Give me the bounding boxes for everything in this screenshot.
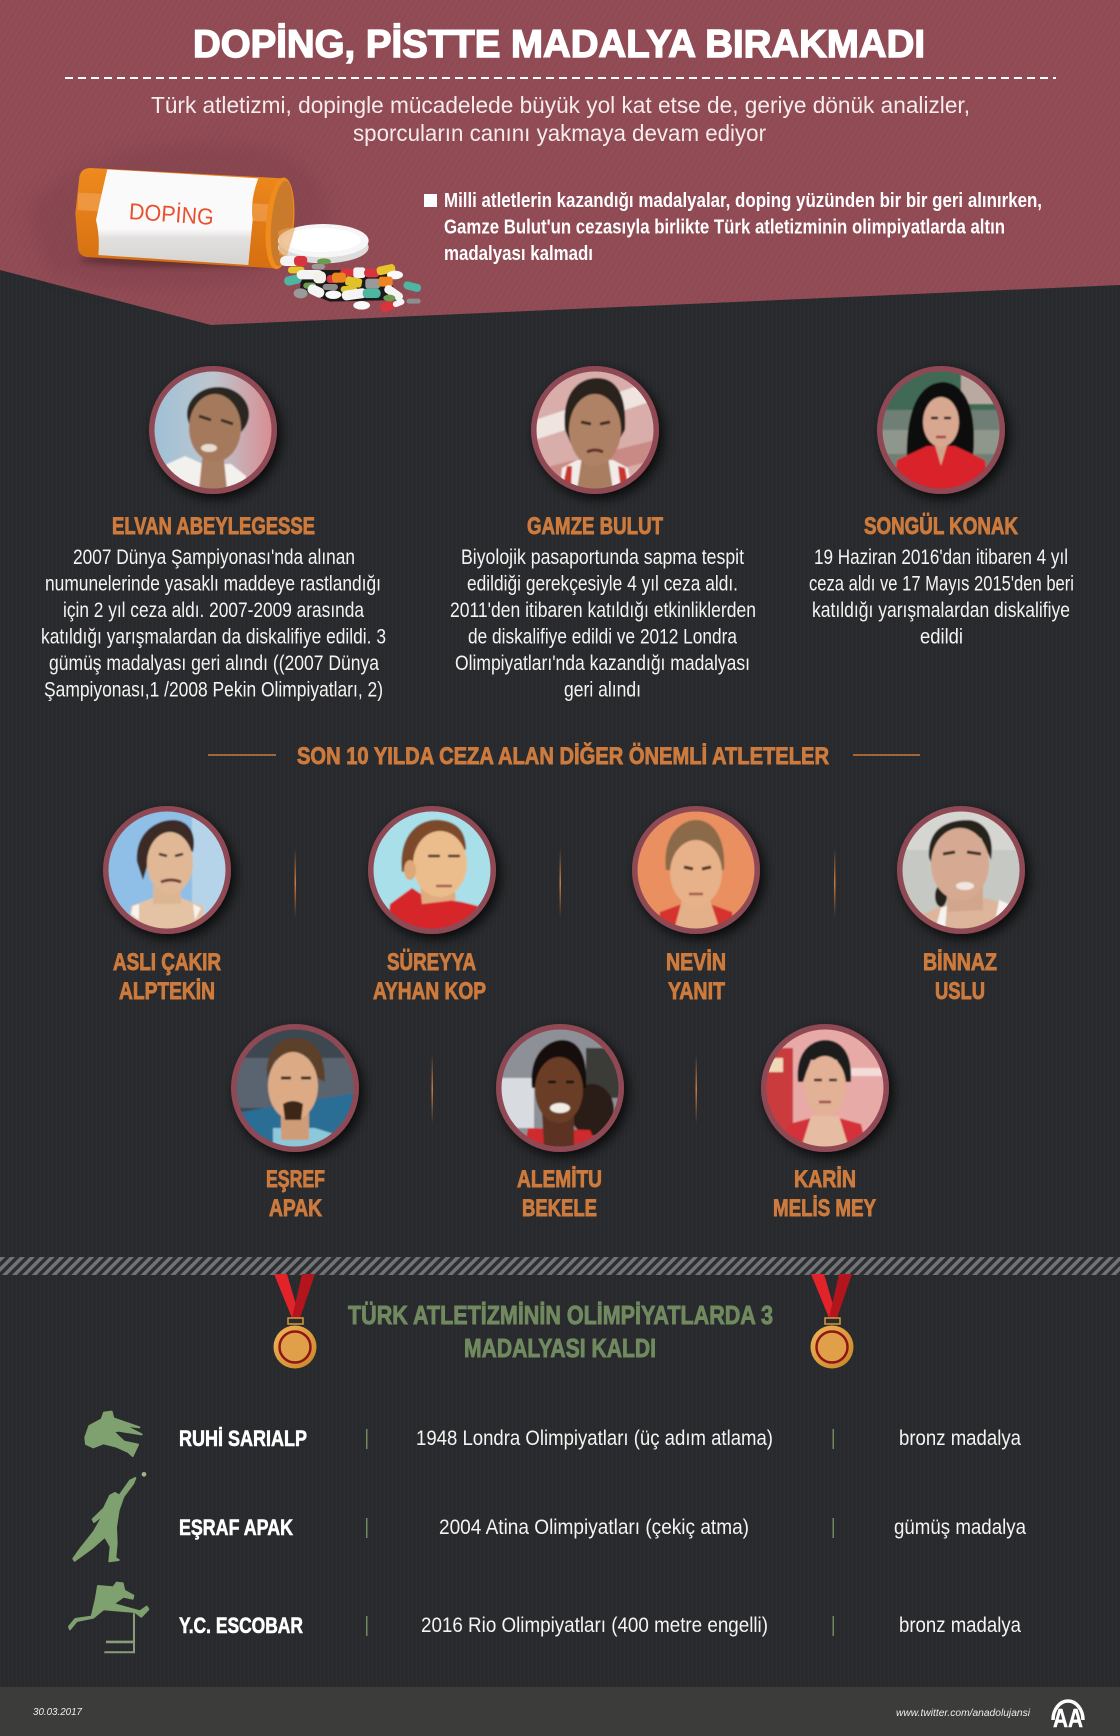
heading: olympic medals: MADALYASI KALDI	[464, 1333, 656, 1363]
bullet text block	[424, 190, 1042, 265]
subtitle: Türk atletizmi, dopingle mücadelede büyük yol kat etse de, geriye dönük analizler,	[151, 92, 970, 118]
icon: hurdler	[69, 1583, 148, 1653]
icon: medal right	[810, 1274, 854, 1368]
description: 2011'den itibaren katıldığı etkinliklerden	[450, 599, 756, 622]
table row: Ruhi Sarıalp	[85, 1412, 1021, 1456]
subtitle	[151, 92, 970, 146]
name	[666, 949, 726, 1005]
name: APAK	[269, 1195, 322, 1222]
description	[41, 546, 386, 702]
name: SONGÜL KONAK	[864, 513, 1018, 540]
athlete: Binnaz Uslu	[900, 809, 1022, 1005]
icon: AA logo: AA	[1053, 1703, 1083, 1733]
portrait	[152, 369, 274, 491]
subtitle: sporcuların canını yakmaya devam ediyor	[353, 120, 766, 146]
portrait	[534, 369, 656, 491]
name: KARİN	[794, 1166, 856, 1193]
table row: Y.C. Escobar: Y.C. ESCOBAR	[179, 1613, 303, 1638]
table row: Eşraf Apak: gümüş madalya	[894, 1516, 1026, 1539]
table row: Y.C. Escobar: bronz madalya	[899, 1614, 1021, 1637]
table row: Eşraf Apak	[73, 1472, 1026, 1561]
description: geri alındı	[564, 678, 641, 702]
table row: Eşraf Apak: 2004 Atina Olimpiyatları (çekiç atma)	[439, 1516, 749, 1539]
name: EŞREF	[266, 1166, 325, 1193]
name	[373, 949, 486, 1005]
name	[266, 1166, 325, 1222]
description: gümüş madalyası geri alındı ((2007 Dünya	[49, 652, 379, 675]
description: Olimpiyatları'nda kazandığı madalyası	[455, 652, 750, 675]
bottle label: DOPİNG	[128, 198, 215, 230]
heading: olympic medals	[348, 1300, 773, 1363]
description: Biyolojik pasaportunda sapma tespit	[461, 546, 744, 569]
athlete: Gamze Bulut	[450, 369, 756, 702]
name: SÜREYYA	[387, 949, 476, 976]
description: edildiği gerekçesiyle 4 yıl ceza aldı.	[467, 572, 738, 596]
bullet text block: madalyası kalmadı	[444, 243, 593, 265]
name: ALEMİTU	[517, 1166, 602, 1193]
description	[450, 546, 756, 702]
name: USLU	[935, 978, 985, 1005]
table row: Ruhi Sarıalp: bronz madalya	[899, 1427, 1021, 1450]
bullet text block: Gamze Bulut'un cezasıyla birlikte Türk atletizminin olimpiyatlarda altın	[444, 216, 1005, 238]
name	[923, 949, 997, 1005]
table row: Ruhi Sarıalp: RUHİ SARIALP	[179, 1426, 307, 1451]
athlete: Karin Melis Mey	[764, 1027, 886, 1222]
description: Şampiyonası,1 /2008 Pekin Olimpiyatları, 2)	[44, 678, 383, 702]
description: edildi	[920, 626, 963, 648]
name: ELVAN ABEYLEGESSE	[112, 513, 315, 540]
icon: medal left	[274, 1274, 316, 1368]
table row: Y.C. Escobar	[69, 1583, 1021, 1653]
source url: www.twitter.com/anadolujansi	[896, 1708, 1031, 1719]
description: için 2 yıl ceza aldı. 2007-2009 arasında	[63, 599, 364, 622]
description: 2007 Dünya Şampiyonası'nda alınan	[73, 546, 355, 569]
table row: Y.C. Escobar: 2016 Rio Olimpiyatları (400 metre engelli)	[421, 1614, 768, 1637]
athlete: Alemitu Bekele	[499, 1027, 621, 1222]
athlete: Songül Konak	[809, 369, 1074, 648]
name	[773, 1166, 876, 1222]
header panel	[0, 0, 1120, 325]
date: 30.03.2017	[33, 1707, 82, 1718]
table row: Eşraf Apak: EŞRAF APAK	[179, 1515, 293, 1540]
description: katıldığı yarışmalardan da diskalifiye edildi. 3	[41, 626, 386, 648]
name: MELİS MEY	[773, 1195, 876, 1222]
portrait	[880, 369, 1002, 491]
athlete: Nevin Yanıt	[635, 809, 757, 1005]
icon: hammer thrower	[73, 1472, 146, 1561]
heading: olympic medals: TÜRK ATLETİZMİNİN OLİMPİYATLARDA 3	[348, 1300, 773, 1330]
athlete: Süreyya Ayhan Kop	[371, 809, 493, 1005]
description: 19 Haziran 2016'dan itibaren 4 yıl	[814, 546, 1068, 569]
name: ALPTEKİN	[119, 978, 215, 1005]
name: BEKELE	[522, 1195, 597, 1222]
name: ASLI ÇAKIR	[113, 949, 221, 976]
name: GAMZE BULUT	[527, 513, 663, 540]
table row: Ruhi Sarıalp: 1948 Londra Olimpiyatları (üç adım atlama)	[416, 1427, 773, 1450]
name	[517, 1166, 602, 1222]
name: YANIT	[668, 978, 725, 1005]
athlete: Aslı Çakır Alptekin	[106, 809, 228, 1005]
name: AYHAN KOP	[373, 978, 486, 1005]
description	[809, 546, 1074, 648]
icon: long jumper	[85, 1412, 142, 1456]
description: numunelerinde yasaklı maddeye rastlandığı	[45, 572, 381, 596]
description: de diskalifiye edildi ve 2012 Londra	[468, 626, 737, 648]
icon: spilled pill bottle	[75, 168, 422, 313]
name: NEVİN	[666, 949, 726, 976]
name: BİNNAZ	[923, 949, 997, 976]
section heading: other athletes: SON 10 YILDA CEZA ALAN DİĞER ÖNEMLİ ATLETELER	[297, 742, 829, 770]
footer bar	[0, 1687, 1120, 1736]
name	[113, 949, 221, 1005]
athlete: Elvan Abeylegesse	[41, 369, 386, 702]
athlete: Eşref Apak	[234, 1027, 356, 1222]
description: katıldığı yarışmalardan diskalifiye	[812, 599, 1070, 622]
title: DOPİNG, PİSTTE MADALYA BIRAKMADI	[193, 23, 925, 66]
